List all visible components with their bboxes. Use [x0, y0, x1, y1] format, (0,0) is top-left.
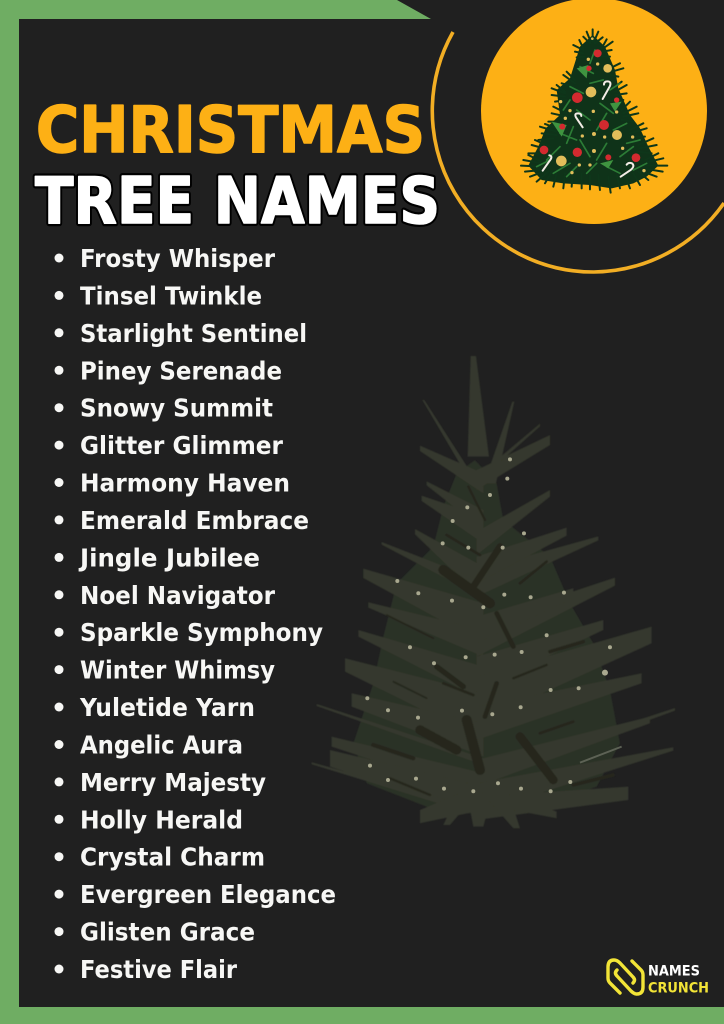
orange circle — [481, 0, 707, 224]
names list: Glitter Glimmer — [80, 431, 284, 460]
names list: Evergreen Elegance — [80, 880, 336, 909]
names list: Starlight Sentinel — [80, 319, 307, 348]
names list: Glisten Grace — [80, 918, 255, 947]
names list: Snowy Summit — [80, 394, 273, 423]
title line: christmas: CHRISTMAS — [36, 93, 425, 168]
names list: Holly Herald — [80, 805, 243, 834]
names list: Piney Serenade — [80, 356, 282, 385]
names list: Merry Majesty — [80, 768, 266, 797]
names list: Festive Flair — [80, 955, 238, 984]
title line: tree names: TREE NAMES — [35, 164, 440, 239]
icon: decorated christmas tree — [521, 29, 667, 193]
names list: Harmony Haven — [80, 468, 290, 498]
names list: Sparkle Symphony — [80, 618, 323, 647]
logo: names crunch: NAMES — [648, 964, 700, 980]
names list: Crystal Charm — [80, 843, 265, 872]
logo: names crunch — [608, 960, 709, 996]
names list: Tinsel Twinkle — [80, 281, 262, 310]
names list: Noel Navigator — [80, 581, 276, 610]
background tree silhouette — [312, 356, 675, 828]
title — [35, 93, 440, 239]
names list: Winter Whimsy — [80, 656, 275, 685]
icon: N mark — [608, 960, 643, 994]
names list — [54, 244, 336, 984]
names list: Jingle Jubilee — [78, 543, 260, 572]
title line: tree names: TREE NAMES — [35, 164, 440, 239]
logo: names crunch: CRUNCH — [648, 980, 709, 996]
names list: Angelic Aura — [80, 730, 243, 760]
names list: Frosty Whisper — [80, 244, 276, 273]
orange ring arc — [432, 32, 724, 272]
names list: Emerald Embrace — [80, 506, 309, 535]
names list: Yuletide Yarn — [79, 693, 255, 722]
